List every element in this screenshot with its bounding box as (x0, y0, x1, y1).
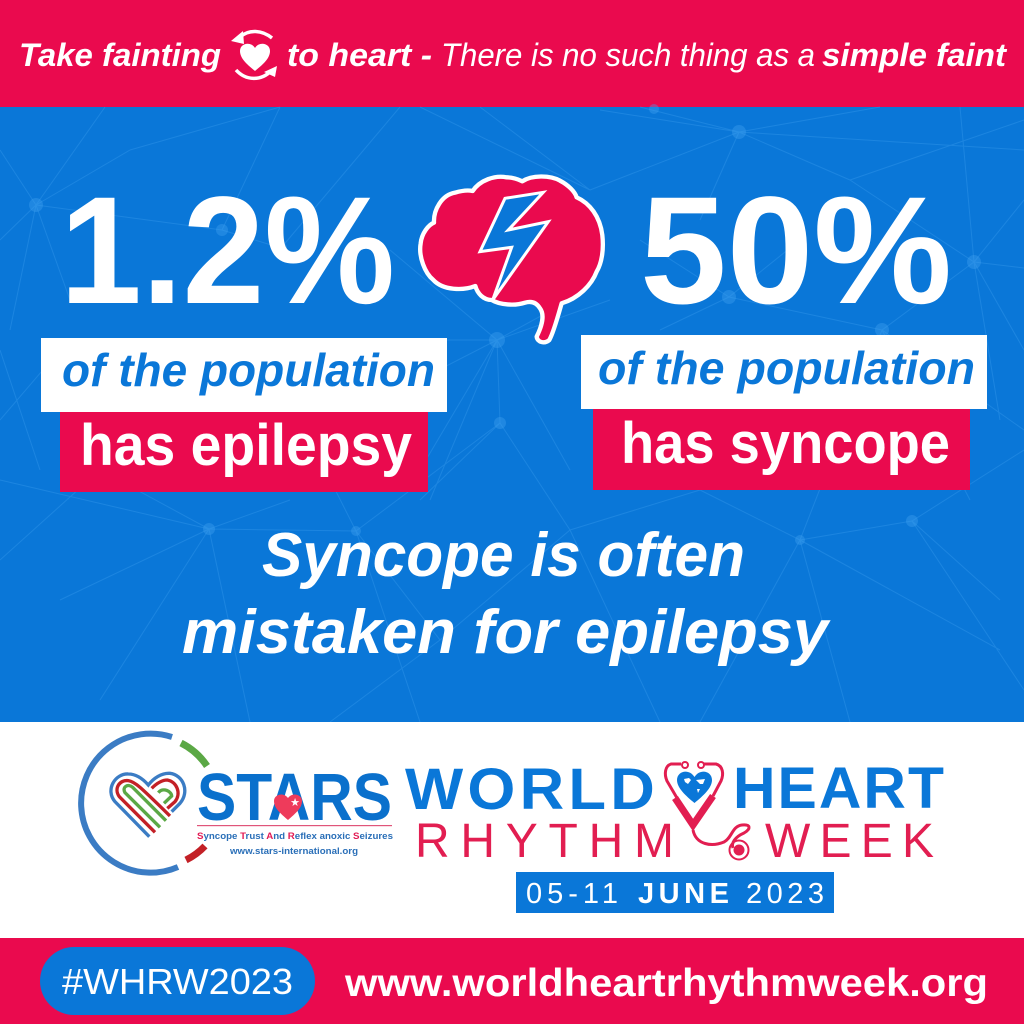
logo: STARS: Syncope Trust And Reflex anoxic Seizures (197, 831, 393, 841)
logo: World Heart Rhythm Week: HEART (733, 756, 946, 821)
striped heart (111, 773, 185, 837)
bottom banner (0, 938, 1024, 1024)
label box: of the population (left): of the population (62, 344, 435, 396)
logo: World Heart Rhythm Week: RHYTHM (415, 815, 674, 868)
statement text: Syncope is often (262, 521, 745, 590)
statistic: 1.2%: 1.2% (60, 165, 395, 336)
icon: heart with circular arrows (231, 31, 277, 78)
network background (0, 107, 1024, 722)
website url: www.worldheartrhythmweek.org (344, 962, 988, 1005)
statistic: 50%: 50% (640, 165, 952, 336)
label box: of the population (right) (581, 335, 987, 409)
date box: JUNE (638, 878, 729, 910)
top banner: simple faint (822, 37, 1007, 73)
statement text (182, 521, 832, 667)
top banner (0, 0, 1024, 107)
date box: 2023 (746, 878, 824, 910)
logo: STARS (81, 734, 393, 873)
icon: brain with lightning bolt (420, 176, 603, 342)
label box: has syncope: has syncope (621, 411, 950, 476)
logo: STARS: www.stars-international.org (229, 846, 358, 856)
statement text: mistaken for epilepsy (182, 598, 832, 667)
logo: STARS: ★ (290, 797, 300, 809)
label box: of the population (right): of the population (598, 342, 975, 394)
date box: 05-11 (526, 878, 618, 910)
white logo panel (0, 722, 1024, 938)
icon: stethoscope with globe heart (665, 762, 749, 860)
logo: STARS: STARS (197, 760, 392, 835)
label box: has epilepsy: has epilepsy (80, 413, 412, 478)
top banner: Take fainting (19, 37, 221, 73)
date box (516, 872, 834, 913)
logo: World Heart Rhythm Week: WEEK (765, 815, 934, 868)
top banner: to heart - (287, 37, 432, 73)
hashtag pill: #WHRW2023 (62, 961, 293, 1002)
logo: World Heart Rhythm Week (405, 756, 946, 868)
ring arcs (81, 734, 207, 873)
label box: of the population (left) (41, 338, 447, 412)
logo: World Heart Rhythm Week: WORLD (405, 757, 659, 822)
blue main panel (0, 107, 1024, 722)
hashtag pill (40, 947, 315, 1015)
top banner: There is no such thing as a (441, 37, 815, 73)
network nodes (29, 104, 981, 545)
